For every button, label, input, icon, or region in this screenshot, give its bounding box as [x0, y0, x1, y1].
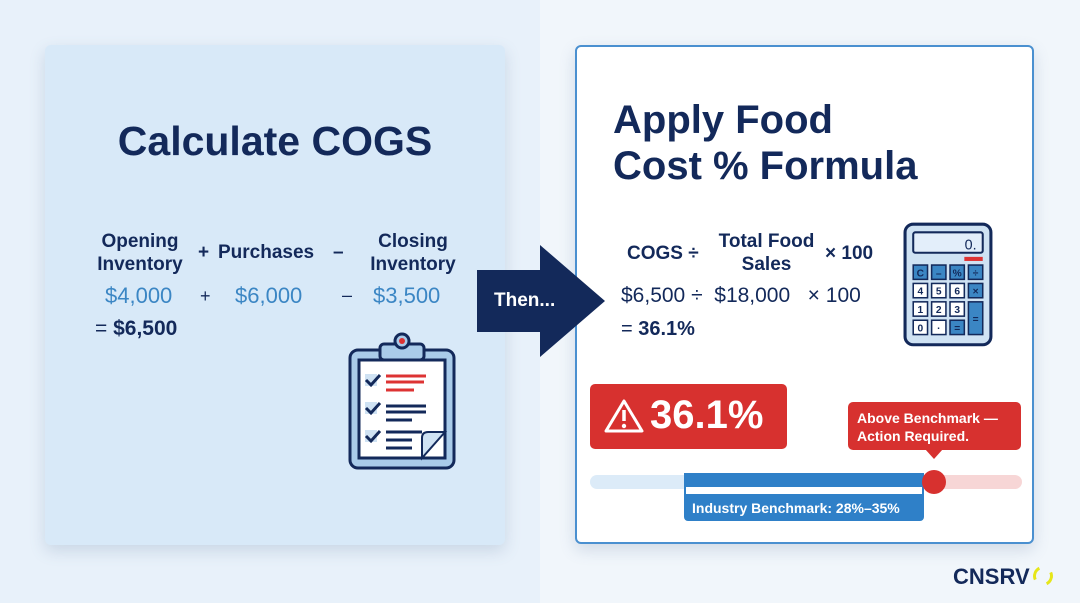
- formula labels: Inventory: [370, 254, 456, 275]
- panel: calculate COGS: [45, 45, 505, 545]
- icon: calculator: 6: [954, 287, 960, 298]
- formula labels: Opening: [101, 231, 179, 252]
- icon: calculator: =: [973, 314, 979, 325]
- icon: calculator: ·: [937, 323, 940, 334]
- formula labels: COGS ÷: [627, 243, 699, 264]
- result: = $6,500: [95, 317, 177, 340]
- formula labels: +: [198, 242, 209, 263]
- arrow: Then...: [477, 245, 605, 357]
- formula labels: Inventory: [97, 254, 183, 275]
- callout: above benchmark: Action Required.: [857, 428, 969, 444]
- icon: calculator: 4: [918, 287, 924, 298]
- formula values: $4,000: [105, 283, 172, 308]
- icon: calculator: [904, 222, 992, 346]
- icon: calculator: 3: [954, 305, 960, 316]
- logo: CNSRV: CNSRV: [953, 564, 1030, 589]
- icon: calculator: ÷: [973, 268, 979, 279]
- formula values: $6,500 ÷ $18,000 × 100: [621, 284, 861, 307]
- marker: [922, 470, 946, 494]
- formula labels: Total Food: [719, 231, 814, 252]
- benchmark bar: [590, 470, 1022, 521]
- formula labels: Sales: [742, 254, 791, 275]
- icon: calculator: 5: [936, 287, 942, 298]
- icon: calculator: –: [936, 268, 942, 279]
- formula values: $6,000: [235, 283, 302, 308]
- formula labels: Purchases: [218, 242, 314, 263]
- formula labels: [627, 231, 873, 275]
- formula values: $3,500: [373, 283, 440, 308]
- formula values: [105, 283, 440, 308]
- heading: Calculate COGS: Calculate COGS: [118, 118, 432, 164]
- icon: calculator: 0: [918, 323, 924, 334]
- icon: calculator: ×: [973, 287, 979, 298]
- heading: Apply Food: [613, 98, 833, 142]
- formula labels: × 100: [825, 243, 873, 264]
- icon: calculator: 0.: [965, 238, 977, 254]
- icon: clipboard: [348, 332, 456, 470]
- arrow: Then...: Then...: [494, 290, 555, 311]
- icon: calculator: =: [954, 323, 960, 334]
- icon: calculator: C: [917, 268, 925, 279]
- callout: above benchmark: Above Benchmark —: [857, 410, 998, 426]
- formula labels: –: [333, 242, 344, 263]
- formula labels: Closing: [378, 231, 448, 252]
- panel: apply food cost formula: [575, 45, 1034, 544]
- badge: 36.1% warning: 36.1%: [650, 393, 763, 437]
- heading: [613, 98, 918, 188]
- benchmark bar: Industry Benchmark: 28%–35%: [692, 500, 900, 516]
- icon: calculator: 2: [936, 305, 942, 316]
- formula values: +: [200, 286, 211, 306]
- callout: above benchmark: [848, 402, 1021, 450]
- formula values: –: [342, 285, 352, 305]
- result: = 36.1%: [621, 318, 695, 340]
- heading: Cost % Formula: [613, 144, 917, 188]
- formula labels: [97, 231, 456, 275]
- icon: calculator: %: [953, 268, 962, 279]
- icon: calculator: 1: [918, 305, 924, 316]
- badge: 36.1% warning: [590, 384, 787, 449]
